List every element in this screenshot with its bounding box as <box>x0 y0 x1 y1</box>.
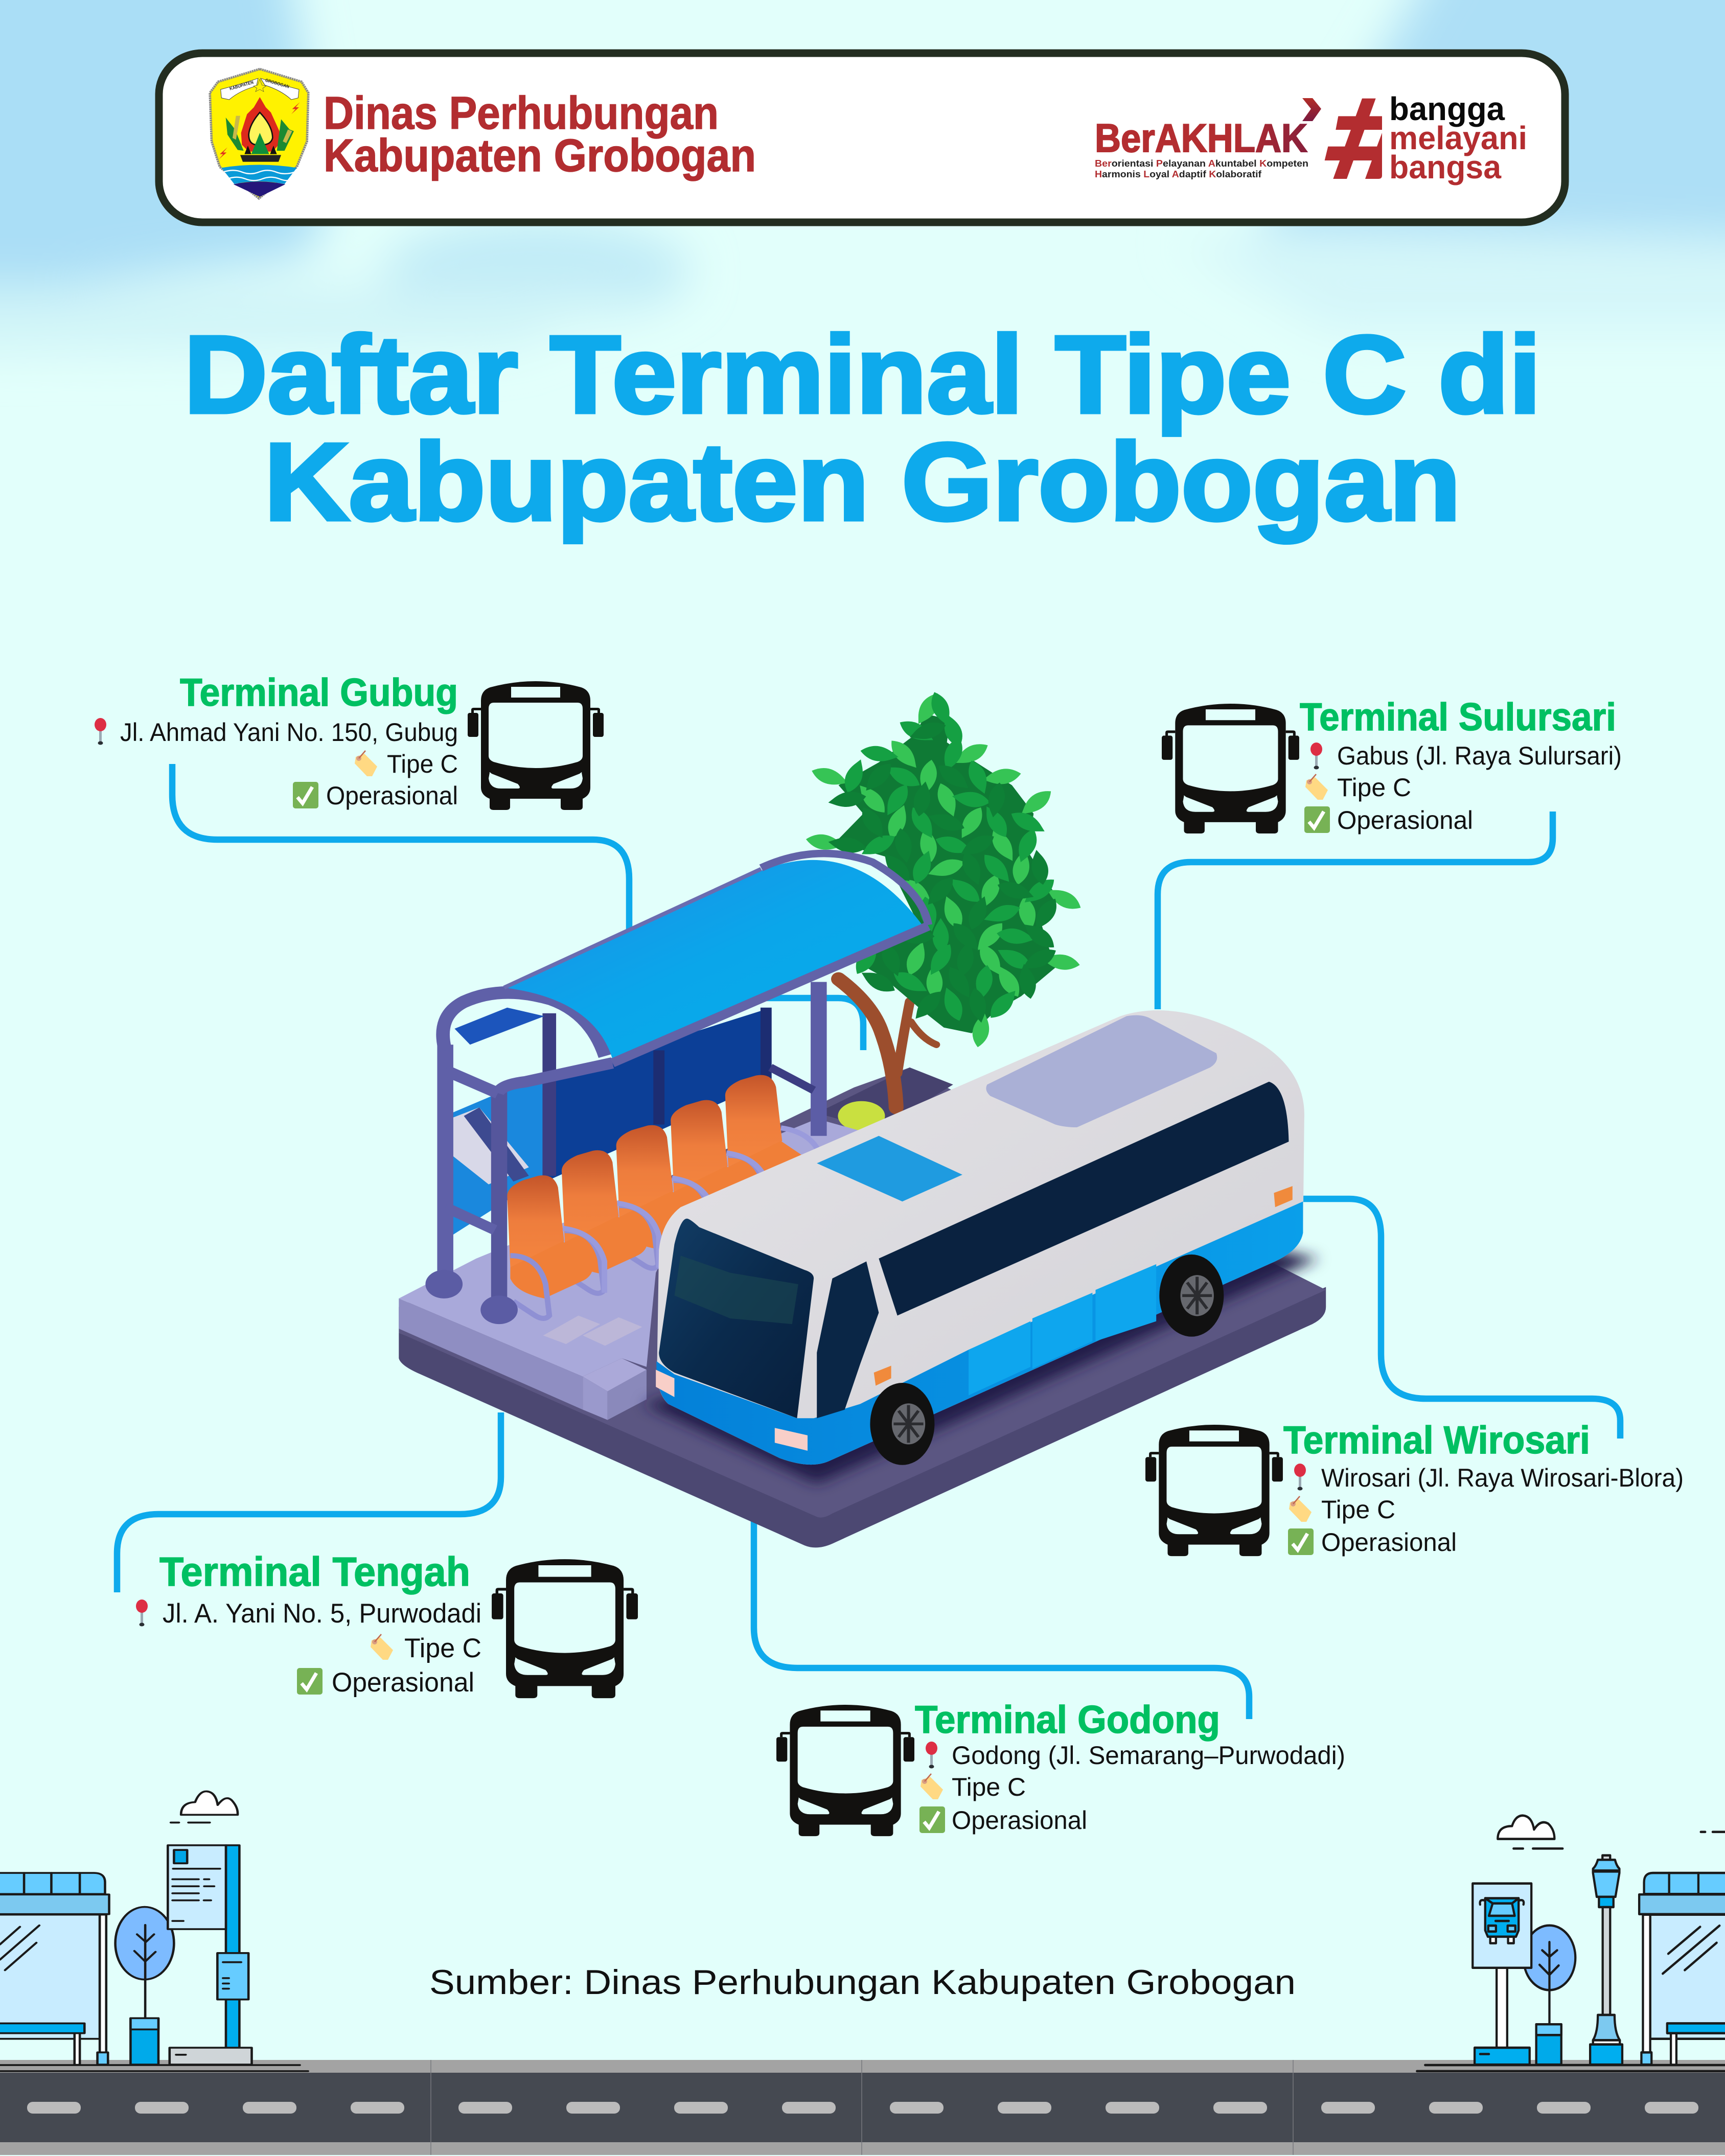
bus side window <box>879 1082 1289 1315</box>
shelter back wall <box>451 982 819 1236</box>
Sulursari details: Gabus (Jl. Raya Sulursari) <box>1337 741 1622 770</box>
Gubug details: Jl. Ahmad Yani No. 150, Gubug <box>120 718 458 747</box>
bus sign <box>1473 1884 1575 2065</box>
BerAKHLAK logo: Harmonis Loyal Adaptif Kolaboratif <box>1095 169 1262 179</box>
bus shadow <box>643 1250 1319 1484</box>
orange seats <box>507 1075 822 1318</box>
bus lights <box>874 1186 1293 1386</box>
bangga melayani bangsa logo <box>1325 90 1527 186</box>
bus lower blue band <box>656 1201 1303 1465</box>
central illustration: bus stop and bus <box>399 689 1326 1547</box>
Tengah details: Tipe C <box>404 1633 481 1663</box>
Terminal Sulursari block <box>1162 696 1622 834</box>
Godong details: Godong (Jl. Semarang–Purwodadi) <box>952 1741 1345 1770</box>
Wirosari details: Wirosari (Jl. Raya Wirosari-Blora) <box>1321 1464 1684 1492</box>
title: Kabupaten Grobogan <box>264 420 1461 543</box>
title <box>184 313 1541 543</box>
Sulursari name: Terminal Sulursari <box>1300 696 1616 739</box>
tree left <box>116 1907 174 2065</box>
shelter right <box>1639 1873 1725 2065</box>
Wirosari details: Tipe C <box>1321 1495 1395 1524</box>
bus door window <box>817 1261 879 1418</box>
Gubug name: Terminal Gubug <box>180 671 458 714</box>
Terminal Gubug block <box>95 671 604 810</box>
Sulursari details <box>1304 741 1622 834</box>
bus roof panels <box>986 1015 1217 1127</box>
Sulursari details: Tipe C <box>1337 773 1411 802</box>
emblem: Kabupaten Grobogan <box>210 69 308 198</box>
Wirosari name: Terminal Wirosari <box>1283 1419 1590 1462</box>
right street scene <box>1417 1816 1725 2071</box>
connector lines <box>117 764 1620 1719</box>
BerAKHLAK logo <box>1095 98 1321 179</box>
bangga melayani bangsa logo: bangsa <box>1389 149 1501 186</box>
Tengah name: Terminal Tengah <box>159 1549 470 1594</box>
Godong bus icon <box>776 1705 914 1836</box>
road <box>0 2060 1725 2155</box>
platform base <box>399 1068 1326 1547</box>
Gubug details: Tipe C <box>387 750 458 778</box>
Tengah bus icon <box>492 1559 638 1698</box>
Wirosari details <box>1288 1464 1684 1557</box>
cloud right <box>1498 1816 1725 1848</box>
tree <box>804 689 1085 1107</box>
title: Daftar Terminal Tipe C di <box>184 313 1541 436</box>
bus stop sign left <box>168 1845 251 2065</box>
bus <box>656 1010 1304 1465</box>
Godong name: Terminal Godong <box>915 1698 1220 1742</box>
Godong details: Operasional <box>952 1806 1087 1835</box>
agency name: Kabupaten Grobogan <box>324 130 756 181</box>
bangga melayani bangsa logo: bangga <box>1389 90 1505 127</box>
BerAKHLAK logo: Berorientasi Pelayanan Akuntabel Kompeten <box>1095 158 1308 169</box>
cloud left <box>171 1791 238 1822</box>
ground lines right <box>1417 2065 1725 2071</box>
Terminal Wirosari block <box>1145 1419 1684 1557</box>
Wirosari details: Operasional <box>1321 1528 1457 1557</box>
Terminal Godong block <box>776 1698 1345 1836</box>
shelter frame <box>425 992 612 1324</box>
header panel <box>159 53 1565 222</box>
Gubug details <box>95 718 458 810</box>
Gubug bus icon <box>468 681 604 810</box>
source note: Sumber: Dinas Perhubungan Kabupaten Grobogan <box>429 1963 1296 2002</box>
emblem: Kabupaten Grobogan: KABUPATEN <box>229 80 254 91</box>
shelter roof <box>454 853 928 1063</box>
Wirosari bus icon <box>1145 1425 1283 1556</box>
bus wheels <box>870 1255 1224 1465</box>
Sulursari bus icon <box>1162 704 1299 833</box>
shelter left <box>0 1873 109 2065</box>
Sulursari details: Operasional <box>1337 806 1473 834</box>
Tengah details: Jl. A. Yani No. 5, Purwodadi <box>163 1598 481 1629</box>
Gubug details: Operasional <box>326 781 458 810</box>
agency name: Dinas Perhubungan <box>324 88 719 139</box>
agency name <box>324 88 756 181</box>
Terminal Tengah block <box>136 1549 638 1698</box>
sidewalk <box>399 1119 879 1420</box>
Tengah details <box>136 1598 481 1698</box>
header card <box>159 53 1565 222</box>
bus windshield <box>659 1219 814 1418</box>
BerAKHLAK logo: BerAKHLAK <box>1095 115 1307 160</box>
Godong details: Tipe C <box>952 1773 1026 1801</box>
sky clouds <box>0 0 1725 353</box>
bangga melayani bangsa logo: melayani <box>1389 120 1527 156</box>
emblem: Kabupaten Grobogan: GROBOGAN <box>265 78 290 89</box>
left street scene <box>0 1791 308 2071</box>
Godong details <box>919 1741 1345 1835</box>
street lamp <box>1590 1856 1622 2065</box>
Tengah details: Operasional <box>332 1667 474 1698</box>
ground lines left <box>0 2065 308 2071</box>
